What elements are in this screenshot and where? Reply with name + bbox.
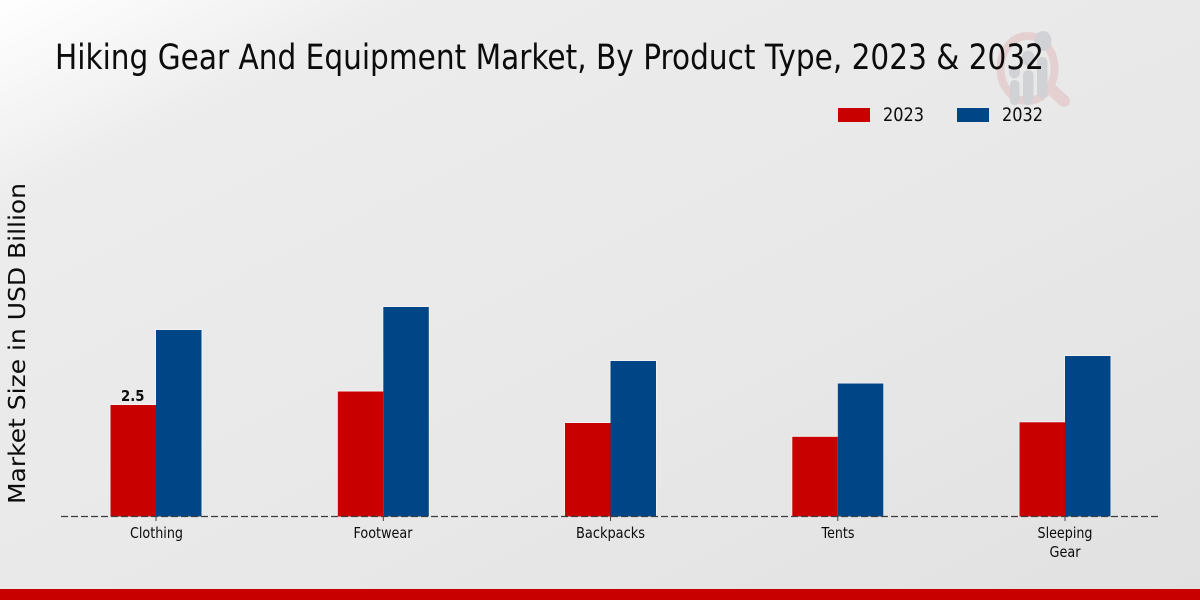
group: Footwear: Footwear (354, 524, 413, 542)
legend item: 2032: 2032 (1002, 104, 1043, 126)
group: Tents (792, 383, 884, 542)
group: Footwear (337, 306, 430, 542)
group: Sleeping Gear: Gear (1050, 543, 1081, 561)
legend item: 2023: 2023 (883, 104, 924, 126)
title: Hiking Gear And Equipment Market, By Product Type, 2023 & 2032 (55, 38, 1044, 78)
group: Clothing: Clothing (130, 524, 183, 542)
group: Tents: Tents (821, 524, 855, 542)
group: Sleeping Gear (1019, 355, 1111, 561)
group: Sleeping Gear: Sleeping (1038, 524, 1092, 542)
icon: watermark magnifier with bars (1000, 31, 1064, 105)
group: Backpacks: Backpacks (576, 524, 645, 542)
group: Clothing (110, 329, 202, 542)
legend item: 2023 (838, 104, 924, 126)
legend item: 2032 (957, 104, 1043, 126)
y axis label: Market Size in USD Billion (5, 183, 31, 504)
group: Clothing: 2.5 (121, 387, 144, 405)
legend (838, 104, 1043, 126)
footer bar (0, 589, 1200, 600)
group: Backpacks (564, 360, 657, 542)
bar chart (61, 306, 1159, 561)
